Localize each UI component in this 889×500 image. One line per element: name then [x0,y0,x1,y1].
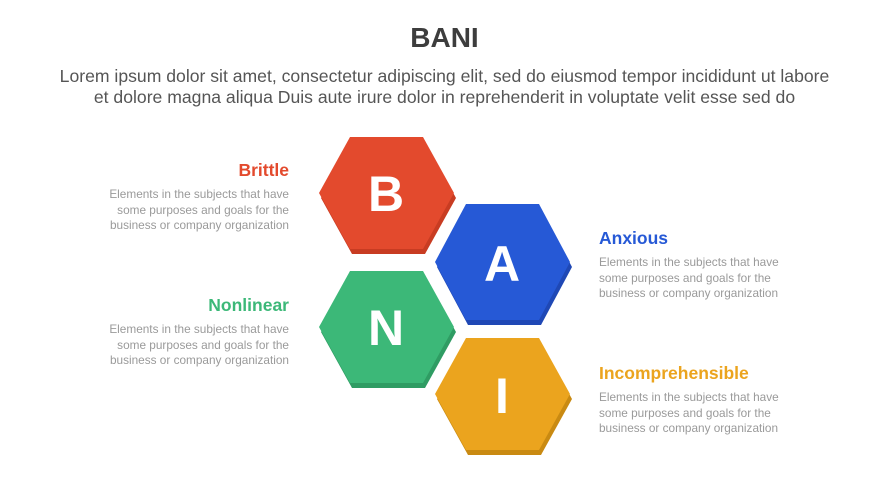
hex I: I [495,368,509,424]
label: Brittle: business or company organization [110,218,289,232]
subtitle [60,66,829,106]
subtitle: Lorem ipsum dolor sit amet, consectetur adipiscing elit, sed do eiusmod tempor incididunt ut labore [60,66,829,86]
label: Brittle [109,160,289,232]
hex B [319,137,456,254]
label: Nonlinear: some purposes and goals for the [117,338,289,352]
label: Brittle: Elements in the subjects that have [109,187,289,201]
label: Incomprehensible: business or company organization [599,421,778,435]
label: Incomprehensible [599,363,779,435]
hex I [435,338,572,455]
label: Anxious: some purposes and goals for the [599,270,771,284]
label: Anxious: Anxious [599,228,668,248]
label: Incomprehensible: Incomprehensible [599,363,749,383]
hex N [319,271,456,388]
label: Incomprehensible: Elements in the subjects that have [599,390,779,404]
title: BANI [410,22,479,53]
label: Anxious [599,228,779,300]
label: Incomprehensible: some purposes and goals for the [599,406,771,420]
label: Nonlinear: business or company organization [110,353,289,367]
hex A: A [484,236,520,292]
hex B: B [368,166,404,222]
subtitle: et dolore magna aliqua Duis aute irure dolor in reprehenderit in voluptate velit esse sed do [94,86,795,106]
label: Nonlinear: Nonlinear [208,295,289,315]
label: Nonlinear: Elements in the subjects that have [109,322,289,336]
label: Anxious: Elements in the subjects that have [599,255,779,269]
hex A [435,204,572,325]
label: Brittle: some purposes and goals for the [117,202,289,216]
hex N: N [368,300,404,356]
label: Nonlinear [109,295,289,367]
label: Anxious: business or company organization [599,286,778,300]
label: Brittle: Brittle [238,160,289,180]
